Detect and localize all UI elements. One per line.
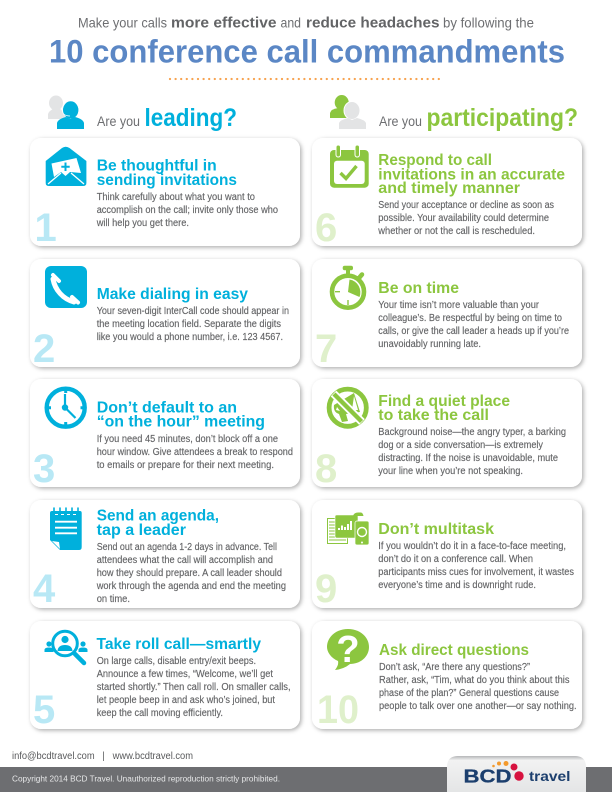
- body text: accomplish on the call; invite only those who: [97, 205, 279, 216]
- heading: and timely manner: [378, 180, 520, 197]
- panel: commandment 6: [312, 138, 582, 250]
- body text: the meeting location field. Separate the digits: [97, 319, 281, 330]
- body text: let people beep in and ask who’s joined, but: [97, 695, 275, 706]
- number 4: 4: [33, 567, 56, 611]
- body text: If you wouldn’t do it in a face-to-face meeting,: [378, 541, 566, 552]
- body text: how they should prepare. A call leader should: [97, 568, 282, 579]
- subtitle: by following the: [443, 14, 534, 30]
- body text: Background noise—the angry typer, a barking: [378, 427, 566, 438]
- body text: [97, 434, 293, 471]
- title: 10 conference call commandments: [49, 34, 565, 70]
- body text: Announce a few times, “Welcome, we’ll get: [97, 669, 273, 680]
- body text: on time.: [97, 594, 130, 605]
- panel: commandment 7: [312, 259, 582, 371]
- heading: [378, 152, 565, 197]
- subtitle: Make your calls: [78, 14, 167, 30]
- column heading: participating: participating?: [426, 104, 578, 132]
- body text: people to talk over one another—or say nothing.: [379, 701, 577, 712]
- column heading: leading: leading?: [144, 104, 237, 132]
- icon: magnifier and people: [44, 631, 88, 663]
- body text: Send your acceptance or decline as soon as: [378, 200, 554, 211]
- number 7: 7: [315, 327, 337, 371]
- icon: clock: [46, 388, 86, 427]
- footer bar: [0, 767, 612, 792]
- number 1: 1: [34, 206, 57, 250]
- heading: Take roll call—smartly: [96, 636, 261, 653]
- panel: commandment 9: [312, 500, 582, 611]
- heading: sending invitations: [97, 172, 237, 189]
- body text: like you would a phone number, i.e. 123 4567.: [97, 332, 283, 343]
- number 9: 9: [315, 567, 337, 611]
- body text: distracting. If the noise is unavoidable, mute: [378, 453, 559, 464]
- copyright: Copyright 2014 BCD Travel. Unauthorized reproduction strictly prohibited.: [12, 774, 280, 784]
- column heading: leading: Are you: [97, 114, 140, 129]
- panel: commandment 1: [30, 138, 300, 250]
- heading: Don’t multitask: [378, 521, 494, 538]
- body text: keep the call moving efficiently.: [97, 708, 223, 719]
- body text: calls, or give the call leader a heads up if you’re: [378, 326, 569, 337]
- body text: Rather, ask, “Tim, what do you think about this: [379, 675, 570, 686]
- body text: hour window. Give attendees a break to respond: [97, 447, 293, 458]
- logo: BCD travel: travel: [529, 768, 570, 784]
- body text: [377, 200, 554, 237]
- logo: BCD travel: BCD: [464, 766, 512, 786]
- body text: dog or a side conversation—is extremely: [378, 440, 543, 451]
- number 8: 8: [315, 447, 337, 491]
- body text: Send out an agenda 1-2 days in advance. Tell: [97, 542, 277, 553]
- panel: commandment 4: [30, 500, 300, 611]
- panel: commandment 5: [30, 621, 300, 732]
- heading: Don’t default to an: [97, 400, 237, 417]
- number 10: 10: [317, 688, 359, 732]
- icon: question bubble: ?: [336, 629, 360, 671]
- logo: BCD travel: [447, 756, 586, 792]
- body text: Don’t ask, “Are there any questions?”: [379, 662, 530, 673]
- body text: possible. Your availability could determine: [378, 213, 550, 224]
- body text: On large calls, disable entry/exit beeps.: [97, 656, 256, 667]
- body text: unavoidably running late.: [378, 339, 481, 350]
- icon: leading people: [48, 96, 84, 129]
- body text: [379, 662, 577, 712]
- number 3: 3: [33, 447, 55, 491]
- column heading: participating: Are you: [379, 114, 422, 129]
- body text: phase of the plan?” General questions cause: [379, 688, 560, 699]
- body text: everyone’s time and is downright rude.: [378, 580, 536, 591]
- icon: multiple devices: [328, 512, 369, 545]
- heading: Be thoughtful in: [97, 158, 217, 175]
- number 5: 5: [33, 688, 55, 732]
- heading: Make dialing in easy: [97, 286, 248, 303]
- heading: [378, 393, 510, 424]
- heading: Ask direct questions: [379, 642, 529, 659]
- icon: envelope: [46, 147, 86, 186]
- heading: “on the hour” meeting: [97, 414, 265, 431]
- panel: commandment 3: [30, 379, 300, 491]
- heading: Find a quiet place: [378, 393, 510, 410]
- body text: Think carefully about what you want to: [97, 192, 256, 203]
- heading: to take the call: [378, 407, 489, 424]
- panel: commandment 10: [312, 621, 582, 732]
- body text: participants miss cues for involvement, it wastes: [378, 567, 574, 578]
- heading: Respond to call: [378, 152, 492, 169]
- body text: If you need 45 minutes, don’t block off a one: [97, 434, 279, 445]
- body text: [97, 306, 289, 343]
- body text: will help you get there.: [96, 218, 189, 229]
- heading: [97, 158, 237, 189]
- body text: whether or not the call is rescheduled.: [377, 226, 535, 237]
- icon: stopwatch: [332, 266, 364, 308]
- body text: attendees what the call will accomplish and: [97, 555, 273, 566]
- body text: Your seven-digit InterCall code should appear in: [97, 306, 289, 317]
- subtitle: reduce headaches: [306, 14, 440, 31]
- heading: tap a leader: [97, 522, 186, 539]
- body text: [378, 300, 569, 350]
- heading: Send an agenda,: [97, 508, 219, 525]
- subtitle: and: [280, 14, 301, 30]
- body text: work through the agenda and end the meeting: [96, 581, 286, 592]
- body text: colleague’s. Be respectful by being on time to: [378, 313, 563, 324]
- icon: calendar: [330, 145, 369, 188]
- icon: question bubble: [327, 629, 369, 671]
- body text: [96, 542, 286, 605]
- body text: [378, 541, 574, 591]
- icon: no noise: [329, 389, 366, 426]
- icon: phone: [45, 266, 87, 308]
- body text: your line when you’re not speaking.: [378, 466, 523, 477]
- heading: [97, 400, 265, 431]
- body text: don’t do it on a conference call. When: [378, 554, 533, 565]
- number 2: 2: [33, 327, 55, 371]
- body text: to emails or prepare for their next meeting.: [97, 460, 274, 471]
- heading: Be on time: [378, 280, 459, 297]
- body text: Your time isn’t more valuable than your: [378, 300, 540, 311]
- panel: commandment 2: [30, 259, 300, 371]
- contact line: info@bcdtravel.com | www.bcdtravel.com: [12, 751, 193, 762]
- column heading: leading: [48, 96, 237, 132]
- subtitle: more effective: [171, 14, 276, 31]
- column heading: participating: [330, 95, 578, 132]
- icon: participating people: [330, 95, 366, 129]
- subtitle: [78, 14, 534, 31]
- body text: started shortly.” Then call roll. On smaller calls,: [97, 682, 291, 693]
- body text: [97, 656, 291, 719]
- number 6: 6: [315, 206, 337, 250]
- body text: [96, 192, 279, 229]
- icon: notepad: [50, 508, 82, 550]
- panel: commandment 8: [312, 379, 582, 491]
- heading: [97, 508, 219, 539]
- heading: invitations in an accurate: [378, 166, 565, 183]
- body text: [378, 427, 566, 477]
